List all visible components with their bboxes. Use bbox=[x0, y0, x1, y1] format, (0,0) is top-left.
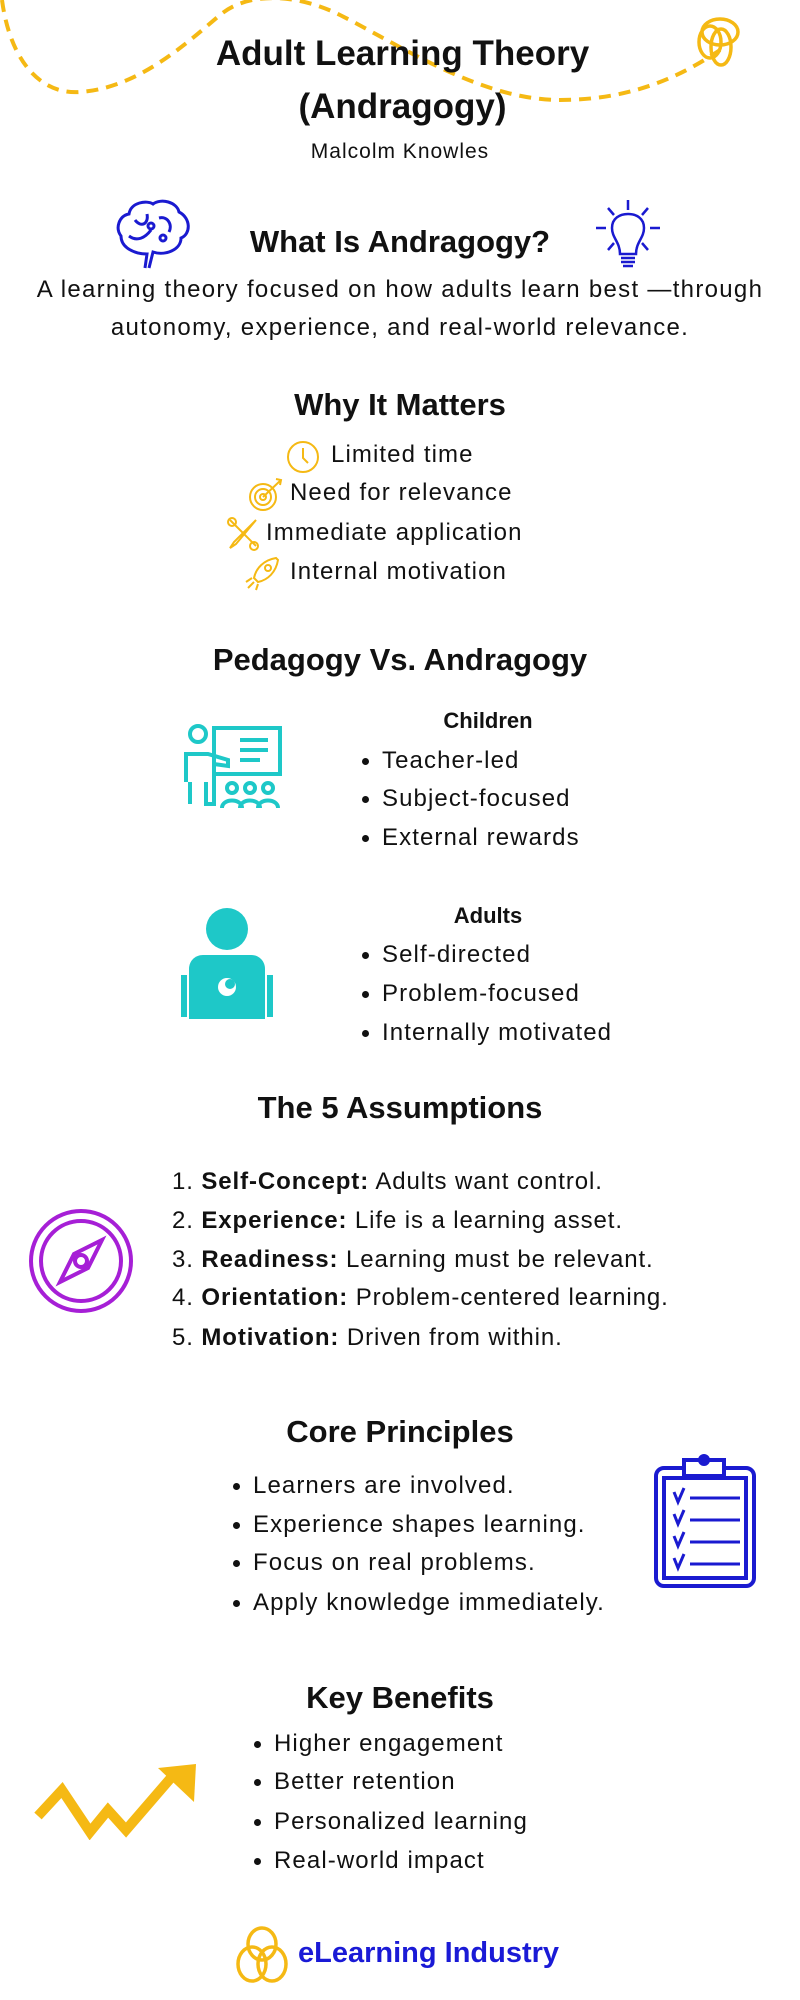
text: definition: A learning theory focused on how adults learn best —through bbox=[37, 276, 763, 303]
list: key benefits bbox=[254, 1730, 528, 1874]
item: Higher engagement bbox=[274, 1730, 504, 1757]
panel: adults bbox=[362, 903, 612, 1046]
icon: clock bbox=[287, 441, 319, 473]
icon: logo top right bbox=[697, 17, 740, 67]
icon: adult learner bbox=[181, 908, 273, 1019]
text: definition: autonomy, experience, and real-world relevance. bbox=[111, 314, 689, 341]
item: internal motivation: Internal motivation bbox=[290, 558, 507, 585]
item: Experience shapes learning. bbox=[253, 1511, 586, 1538]
icon: compass bbox=[29, 1209, 133, 1313]
heading: core principles: Core Principles bbox=[286, 1414, 514, 1449]
title: (Andragogy) bbox=[298, 87, 507, 126]
icon: clipboard bbox=[654, 1454, 756, 1588]
item: limited time: Limited time bbox=[331, 441, 474, 468]
item: External rewards bbox=[382, 824, 580, 851]
footer: logo bbox=[236, 1926, 559, 1983]
heading: key benefits: Key Benefits bbox=[306, 1680, 494, 1715]
list: core principles bbox=[233, 1472, 605, 1616]
item: Problem-focused bbox=[382, 980, 580, 1007]
item: Internally motivated bbox=[382, 1019, 612, 1046]
heading: adults: Adults bbox=[454, 903, 522, 928]
icon: footer logo bbox=[236, 1926, 288, 1983]
text: brand: eLearning Industry bbox=[298, 1937, 559, 1969]
subtitle: Malcolm Knowles bbox=[311, 140, 489, 163]
icon: rocket bbox=[246, 556, 280, 590]
item: immediate application: Immediate application bbox=[266, 519, 523, 546]
icon: brain bbox=[116, 200, 190, 268]
list: assumptions bbox=[172, 1168, 669, 1351]
item 5: 5. Motivation: Driven from within. bbox=[172, 1324, 563, 1351]
heading: what is andragogy: What Is Andragogy? bbox=[250, 224, 550, 259]
item: Focus on real problems. bbox=[253, 1549, 536, 1576]
item: Better retention bbox=[274, 1768, 456, 1795]
item: Teacher-led bbox=[382, 747, 520, 774]
item: need for relevance: Need for relevance bbox=[290, 479, 513, 506]
item: Personalized learning bbox=[274, 1808, 528, 1835]
icon: light bulb bbox=[596, 200, 660, 268]
item 1: 1. Self-Concept: Adults want control. bbox=[172, 1168, 603, 1195]
icon: trend arrow bbox=[34, 1764, 196, 1840]
list: why it matters bbox=[227, 441, 523, 590]
heading: children: Children bbox=[443, 708, 533, 733]
item: Apply knowledge immediately. bbox=[253, 1589, 605, 1616]
item 3: 3. Readiness: Learning must be relevant. bbox=[172, 1246, 654, 1273]
decoration: dashed curve bbox=[0, 0, 722, 102]
icon: teacher bbox=[184, 724, 282, 808]
text: definition bbox=[36, 276, 763, 341]
title: Adult Learning Theory bbox=[216, 34, 589, 73]
item: Learners are involved. bbox=[253, 1472, 515, 1499]
panel: children bbox=[362, 708, 580, 851]
heading: the 5 assumptions: The 5 Assumptions bbox=[258, 1090, 542, 1125]
item: Real-world impact bbox=[274, 1847, 485, 1874]
icon: target bbox=[249, 478, 282, 511]
icon: tools bbox=[227, 517, 259, 551]
item 2: 2. Experience: Life is a learning asset. bbox=[172, 1207, 623, 1234]
item: Self-directed bbox=[382, 941, 531, 968]
heading: why it matters: Why It Matters bbox=[294, 387, 506, 422]
item: Subject-focused bbox=[382, 785, 571, 812]
title bbox=[216, 34, 589, 126]
item 4: 4. Orientation: Problem-centered learning. bbox=[172, 1284, 669, 1311]
heading: pedagogy vs andragogy: Pedagogy Vs. Andragogy bbox=[213, 642, 587, 677]
